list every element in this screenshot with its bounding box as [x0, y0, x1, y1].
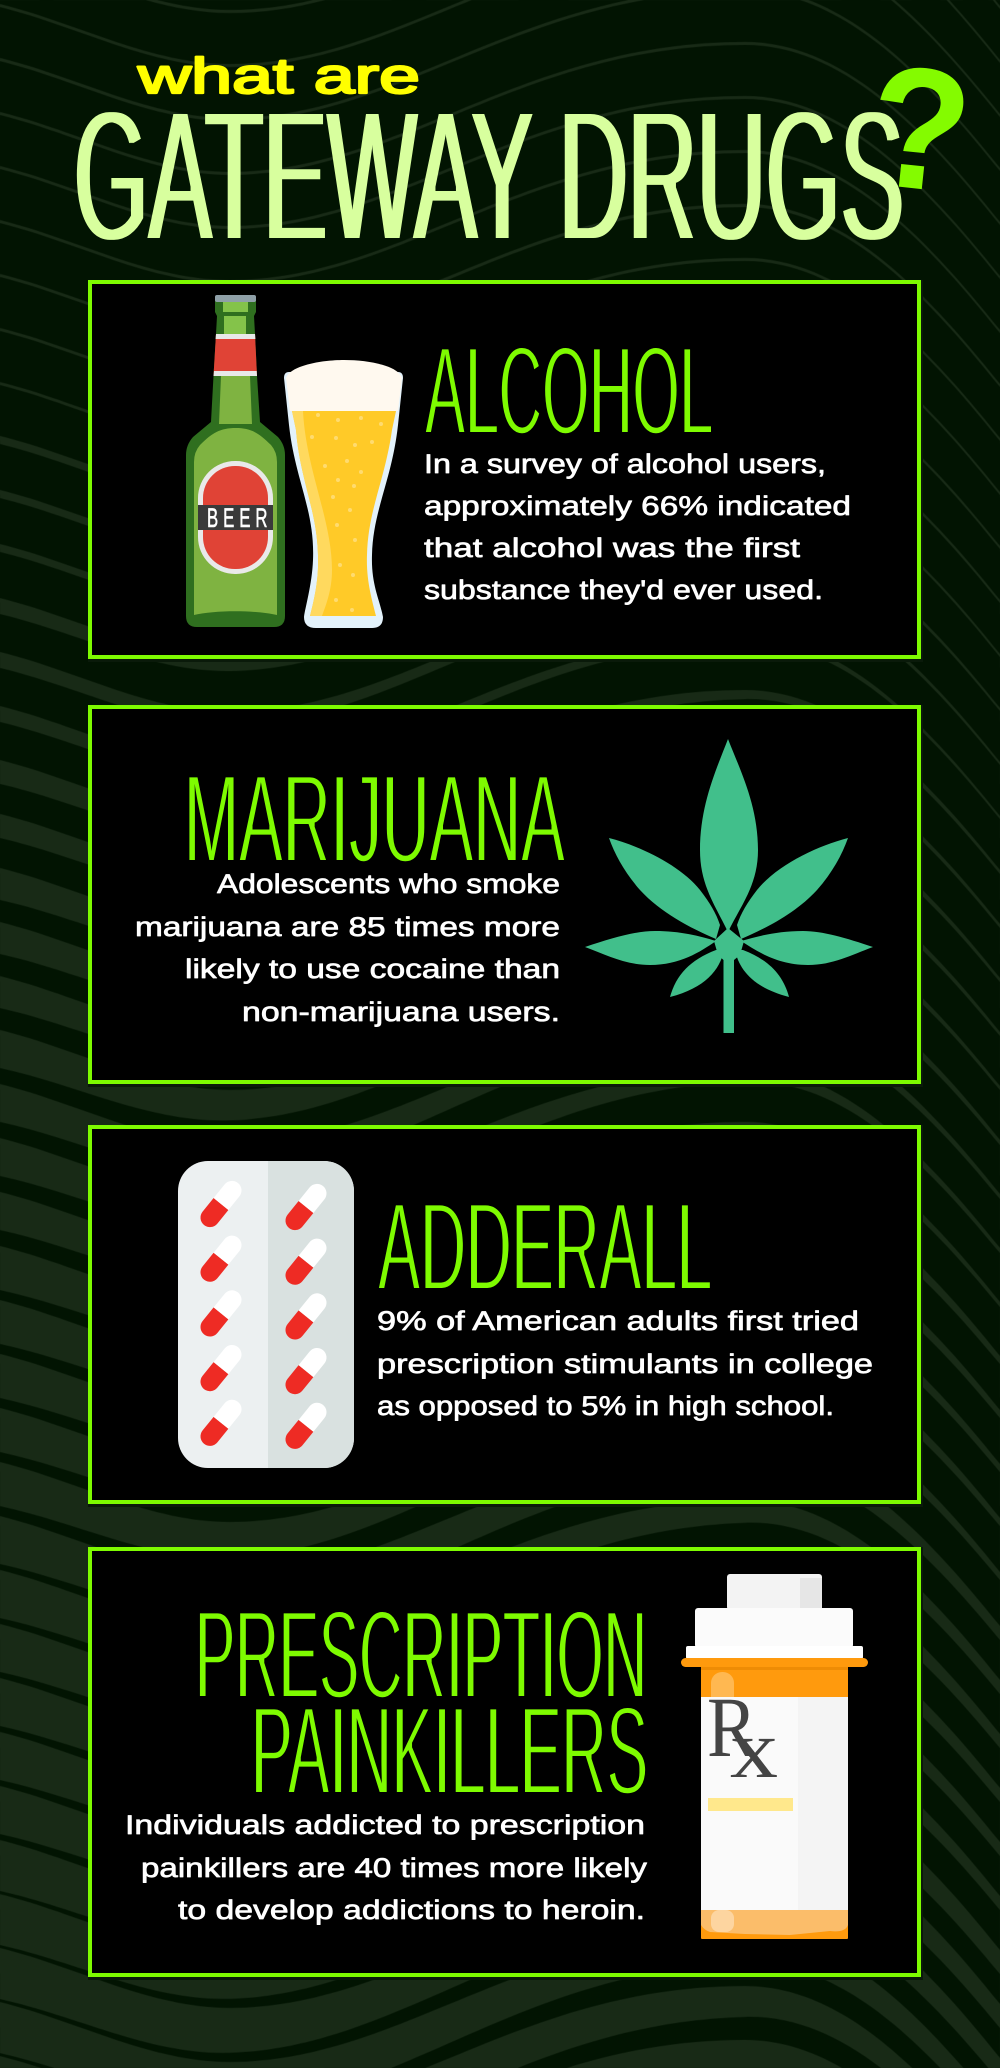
- icon: beer bottle: [186, 295, 285, 627]
- icon: question mark: ?: [860, 29, 980, 230]
- text block: painkillers fact: [125, 1810, 648, 1925]
- title: what are gateway drugs: [74, 29, 980, 280]
- text block: adderall fact: [377, 1306, 873, 1421]
- icon: cannabis leaf: [585, 739, 873, 1033]
- text block: marijuana fact: non-marijuana users.: [242, 997, 560, 1027]
- text block: adderall fact: as opposed to 5% in high school.: [377, 1391, 834, 1421]
- text block: alcohol fact: substance they'd ever used.: [424, 575, 823, 605]
- rx symbol: R: [707, 1679, 758, 1775]
- panel: prescription painkillers: [88, 1547, 923, 1980]
- panel: adderall: [88, 1125, 923, 1507]
- text block: painkillers fact: Individuals addicted to prescription: [125, 1810, 645, 1840]
- panel: marijuana: [88, 705, 923, 1087]
- text block: marijuana fact: marijuana are 85 times more: [135, 912, 560, 942]
- icon: blister pack of pills: [178, 1161, 354, 1468]
- text block: adderall fact: 9% of American adults first tried: [377, 1306, 859, 1336]
- text block: adderall fact: prescription stimulants in college: [377, 1349, 873, 1379]
- text block: alcohol fact: In a survey of alcohol users,: [424, 449, 826, 479]
- rx symbol: [707, 1679, 778, 1795]
- rx symbol: x: [730, 1703, 778, 1795]
- icon: beer glass: [284, 360, 403, 628]
- heading: prescription painkillers: [195, 1584, 648, 1821]
- text block: marijuana fact: Adolescents who smoke: [217, 869, 560, 899]
- icon: prescription bottle: [681, 1574, 868, 1939]
- text block: marijuana fact: likely to use cocaine than: [185, 954, 560, 984]
- text block: alcohol fact: that alcohol was the first: [424, 533, 801, 563]
- text block: painkillers fact: to develop addictions to heroin.: [178, 1895, 645, 1925]
- beer label text: BEER: [207, 503, 272, 533]
- heading: marijuana: MARIJUANA: [184, 748, 565, 889]
- panel: alcohol: [88, 280, 923, 662]
- title line: what are: what are: [137, 48, 420, 104]
- text block: marijuana fact: [135, 869, 560, 1027]
- text block: painkillers fact: painkillers are 40 times more likely: [141, 1853, 648, 1883]
- text block: alcohol fact: approximately 66% indicated: [424, 491, 851, 521]
- text block: alcohol fact: [424, 449, 851, 605]
